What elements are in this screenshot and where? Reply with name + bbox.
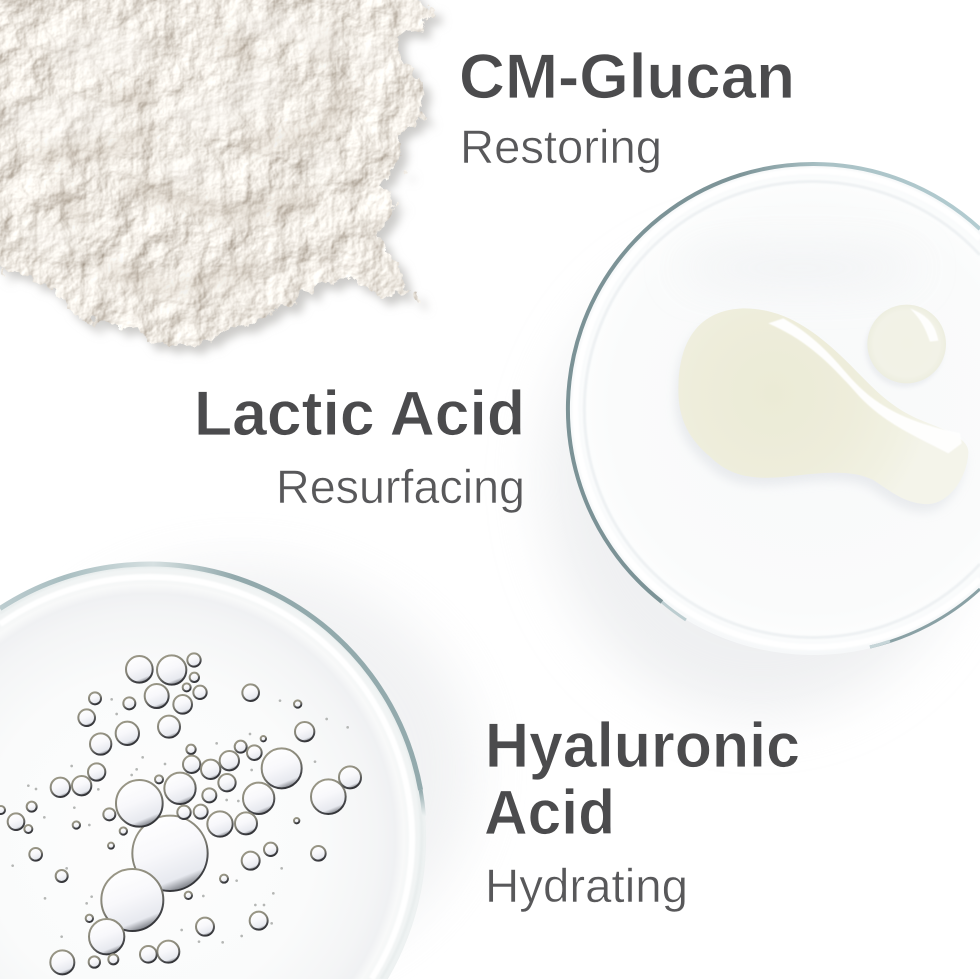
subheading: Resurfacing: Resurfacing [276, 460, 525, 513]
subheading: Restoring: Restoring [460, 120, 662, 173]
tiny bubbles [11, 698, 349, 944]
powder crevices [40, 30, 350, 290]
heading: Lactic Acid: Lactic Acid [194, 379, 525, 449]
dish rim [0, 564, 424, 816]
heading: Lactic Acid [194, 379, 525, 513]
bubbles [0, 653, 361, 974]
heading: Hyaluronic Acid [484, 711, 800, 912]
lactic acid liquid [675, 305, 968, 512]
heading: Hyaluronic Acid: Hyaluronic [485, 711, 800, 781]
subheading: Hydrating: Hydrating [485, 859, 688, 912]
dish rim [568, 164, 980, 647]
panel: lactic acid petri dish [545, 163, 980, 715]
panel: hyaluronic acid petri dish [0, 563, 475, 979]
heading: Hyaluronic Acid: Acid [484, 778, 615, 848]
powder highlights [0, 12, 388, 251]
heading: CM-Glucan: CM-Glucan [459, 42, 795, 112]
heading: CM-Glucan [459, 42, 795, 173]
powder: CM-Glucan [0, 0, 432, 346]
